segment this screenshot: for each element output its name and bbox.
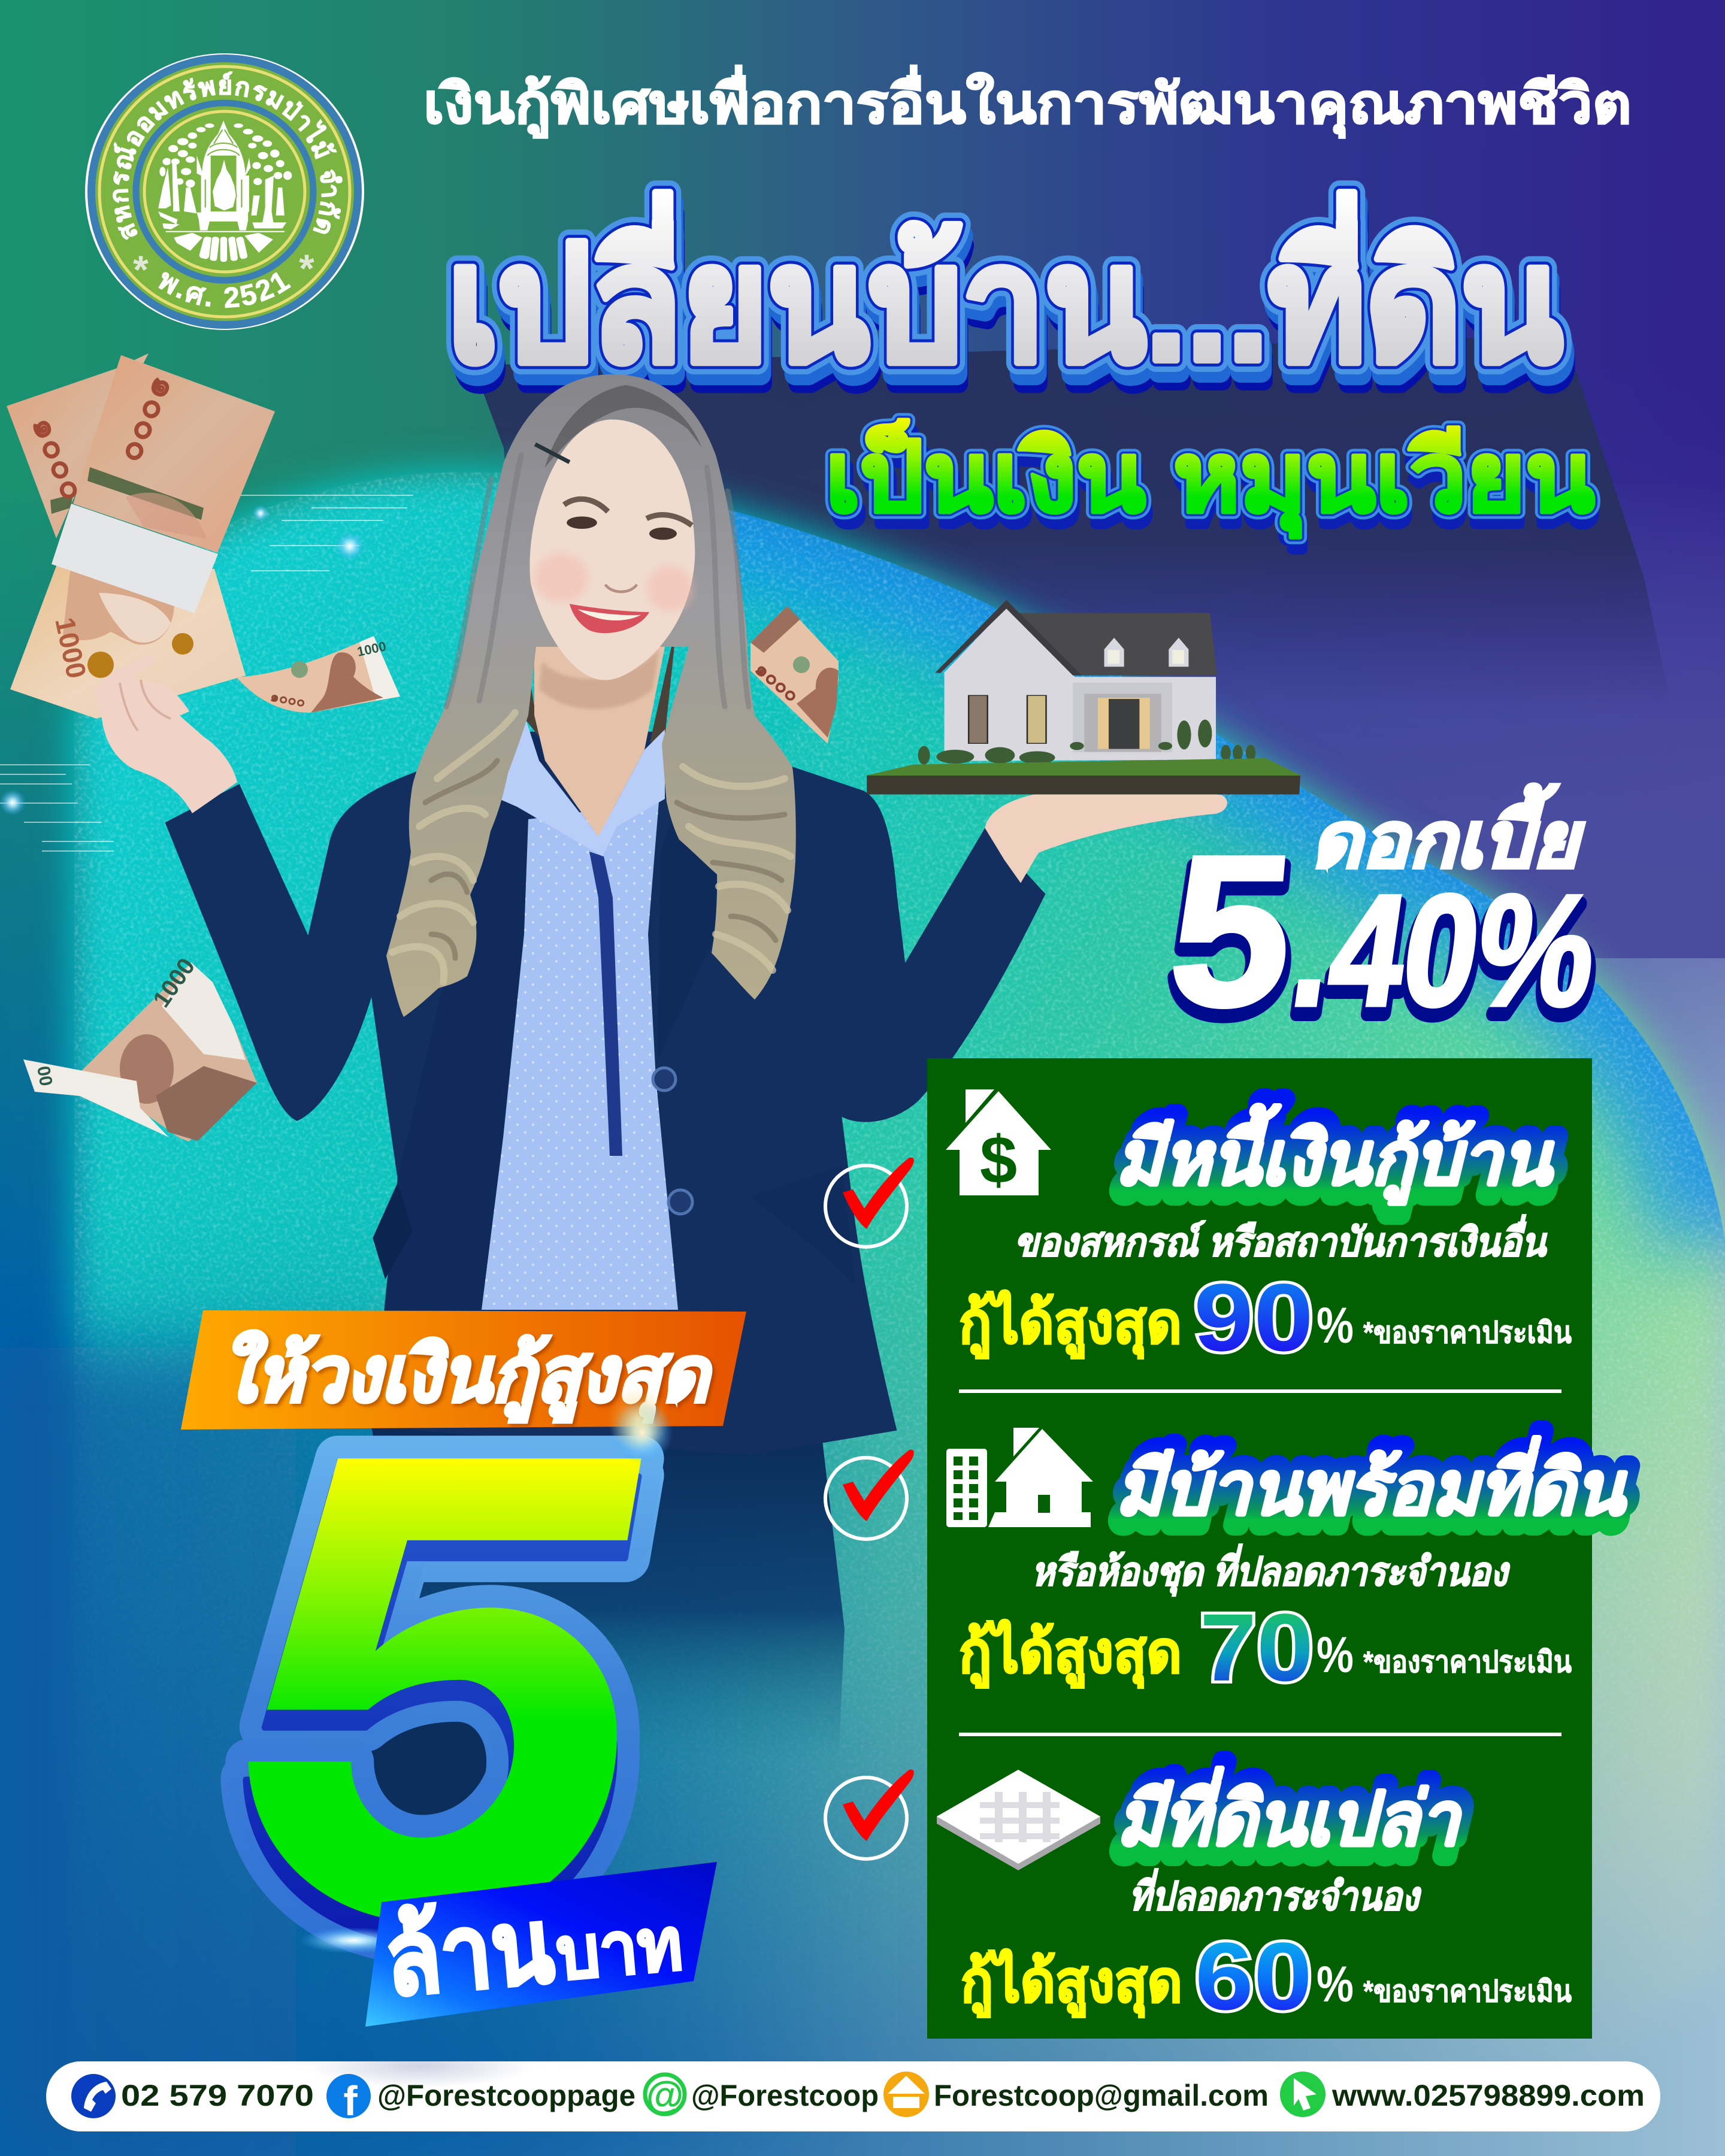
row 1 max loan: กู้ได้สูงสุด	[959, 1290, 1182, 1359]
icon: line: @	[646, 2073, 683, 2116]
row 3 description: ที่ปลอดภาระจำนอง	[1129, 1869, 1421, 1918]
row 1 max loan: 90	[1194, 1264, 1314, 1371]
row 2 max loan: 70	[1200, 1594, 1314, 1701]
icon: facebook	[326, 2074, 371, 2124]
woman nose	[606, 585, 637, 592]
house dormers	[1104, 638, 1124, 667]
row 1 max loan: %	[1317, 1297, 1354, 1353]
logo	[85, 53, 364, 330]
woman hair clip	[535, 444, 570, 462]
contact bar	[46, 2061, 1660, 2131]
logo year: พ.ศ. 2521	[158, 272, 291, 308]
woman jacket	[165, 732, 1045, 1455]
headline: main title: เปลี่ยนบ้าน...ที่ดิน	[453, 213, 1568, 415]
shrubs	[918, 720, 1255, 765]
logo emblem	[158, 121, 292, 262]
money stack top left: ๑๐๐๐	[116, 371, 187, 471]
house roof	[1007, 613, 1217, 676]
icon: house with dollar: $	[980, 1122, 1017, 1197]
headline: main title: เปลี่ยนบ้าน...ที่ดิน	[447, 192, 1563, 394]
row 2 max loan: กู้ได้สูงสุด	[959, 1619, 1182, 1688]
banner text large: ล้าน	[380, 1888, 558, 2017]
emblem trees	[159, 123, 292, 188]
row 1 description: ของสหกรณ์ หรือสถาบันการเงินอื่น	[1014, 1215, 1548, 1264]
headline: second line: เป็นเงิน หมุนเวียน	[825, 419, 1594, 538]
money note flying right of stack: ๑๐๐๐	[269, 688, 307, 710]
checkmark 1	[825, 1158, 914, 1247]
woman hair	[386, 374, 796, 1017]
checkmark 3	[825, 1770, 914, 1859]
interest value shadow	[1161, 820, 1607, 1059]
headline: second line: เป็นเงิน หมุนเวียน	[830, 431, 1594, 550]
lawn	[866, 758, 1302, 776]
emblem figure	[212, 158, 237, 211]
interest value	[1161, 811, 1607, 1051]
row 2 description: หรือห้องชุด ที่ปลอดภาระจำนอง	[1031, 1544, 1510, 1597]
woman buttons	[653, 1068, 692, 1214]
row 2 heading: มีบ้านพร้อมที่ดิน	[1110, 1448, 1622, 1542]
icon: house with dollar	[946, 1089, 1051, 1197]
row 2 max loan: *ของราคาประเมิน	[1363, 1645, 1572, 1679]
headline: main title: เปลี่ยนบ้าน...ที่ดิน	[447, 192, 1563, 394]
money note flying lower left: 1000	[148, 953, 200, 1012]
headline: second line: เป็นเงิน หมุนเวียน	[825, 419, 1594, 538]
money stack top left: ๑๐๐๐	[24, 410, 94, 506]
banner: 5 million baht	[365, 1862, 717, 2027]
house porch	[1073, 683, 1172, 752]
money note flying right of stack: 1000	[356, 638, 388, 659]
woman right hand	[985, 790, 1227, 883]
icon: phone	[71, 2074, 116, 2118]
money stack top left	[7, 353, 275, 719]
money stack top left: 1000	[49, 614, 92, 681]
interest label: ดอกเบี้ย	[1311, 784, 1584, 883]
facebook handle: @Forestcooppage	[377, 2079, 635, 2112]
row 2 max loan	[959, 1594, 1572, 1701]
row 3 heading: มีที่ดินเปล่า	[1112, 1778, 1457, 1872]
woman	[93, 374, 1227, 1761]
house windows	[969, 695, 988, 743]
row 1 max loan	[959, 1264, 1572, 1371]
divider	[959, 1389, 1561, 1393]
icon: web cursor	[1280, 2072, 1325, 2117]
woman left hand	[93, 655, 237, 813]
soil	[867, 776, 1300, 795]
logo stars: *	[299, 246, 314, 290]
headline: second line: เป็นเงิน หมุนเวียน	[825, 419, 1594, 538]
line handle: @Forestcoop	[691, 2079, 879, 2112]
row 1 heading	[1112, 1097, 1560, 1216]
house on lawn	[866, 600, 1302, 795]
woman neck	[534, 647, 665, 837]
headline: subtitle: เงินกู้พิเศษเพื่อการอื่นในการพัฒนาคุณภาพชีวิต	[423, 65, 1632, 138]
woman shirt placket	[589, 852, 622, 1156]
woman face	[529, 419, 695, 680]
woman hair top shade	[544, 385, 701, 468]
money note flying lower left	[23, 953, 257, 1141]
banner: max credit line: ให้วงเงินกู้สูงสุด	[220, 1331, 713, 1422]
banner: max credit line: ให้วงเงินกู้สูงสุด	[222, 1333, 715, 1425]
row 3 max loan: *ของราคาประเมิน	[1363, 1975, 1572, 2008]
woman mouth	[570, 604, 649, 633]
row 2 heading: มีบ้านพร้อมที่ดิน	[1120, 1429, 1632, 1523]
row 3 max loan: %	[1317, 1956, 1354, 2012]
woman shirt	[482, 802, 678, 1310]
checkmark 2	[825, 1450, 914, 1539]
interest value shadow: 5	[1161, 820, 1302, 1059]
emblem shrine	[196, 121, 250, 231]
logo stars: *	[133, 247, 149, 292]
woman neck shadow hair	[520, 623, 677, 743]
phone number: 02 579 7070	[121, 2079, 314, 2112]
headline: main title: เปลี่ยนบ้าน...ที่ดิน	[447, 192, 1563, 394]
woman collar	[494, 701, 603, 856]
row 3 heading: มีที่ดินเปล่า	[1121, 1760, 1467, 1854]
money note flying behind head	[750, 606, 839, 744]
icon: email home	[883, 2072, 929, 2117]
email: Forestcoop@gmail.com	[934, 2079, 1269, 2112]
woman hair curls	[392, 455, 791, 982]
woman eyes and brows	[564, 499, 608, 511]
row 2 heading: มีบ้านพร้อมที่ดิน	[1115, 1436, 1627, 1530]
emblem logs	[173, 232, 274, 262]
row 3 heading: มีที่ดินเปล่า	[1116, 1767, 1462, 1861]
row 2 max loan: %	[1317, 1627, 1354, 1683]
money note flying lower left: 00	[33, 1064, 56, 1088]
icon: facebook: f	[343, 2078, 358, 2124]
money note flying right of stack	[237, 636, 400, 713]
row 3 max loan: กู้ได้สูงสุด	[961, 1949, 1182, 2018]
banner text small: บาท	[553, 1903, 685, 1995]
interest rate	[1161, 784, 1607, 1059]
woman skirt	[371, 1419, 845, 1761]
row 3 max loan	[961, 1922, 1572, 2030]
logo stars	[133, 246, 314, 292]
row 1 heading: มีหนี้เงินกู้บ้าน	[1121, 1097, 1560, 1198]
interest value: .40%	[1283, 862, 1607, 1039]
icon: building and house	[946, 1428, 1093, 1527]
banner: max credit line	[181, 1310, 746, 1430]
icon: land plot with fence	[937, 1770, 1100, 1870]
interest value: 5	[1161, 811, 1302, 1051]
panel: loan conditions	[927, 1058, 1632, 2039]
money note flying behind head: ๑๐๐๐	[750, 657, 804, 707]
row 3 max loan: 60	[1195, 1922, 1312, 2030]
row 1 heading: มีหนี้เงินกู้บ้าน	[1112, 1115, 1550, 1216]
row 1 max loan: *ของราคาประเมิน	[1363, 1316, 1572, 1349]
speed lines and sparkles	[0, 495, 413, 851]
row 1 heading: มีหนี้เงินกู้บ้าน	[1115, 1104, 1554, 1205]
interest value shadow: .40%	[1283, 871, 1607, 1047]
logo ring text: สหกรณ์ออมทรัพย์กรมป่าไม้ จำกัด	[113, 71, 343, 240]
headline: main title: เปลี่ยนบ้าน...ที่ดิน	[450, 203, 1566, 405]
big number 5	[246, 1388, 673, 1954]
website: www.025798899.com	[1331, 2079, 1645, 2112]
house wall	[945, 607, 1216, 761]
